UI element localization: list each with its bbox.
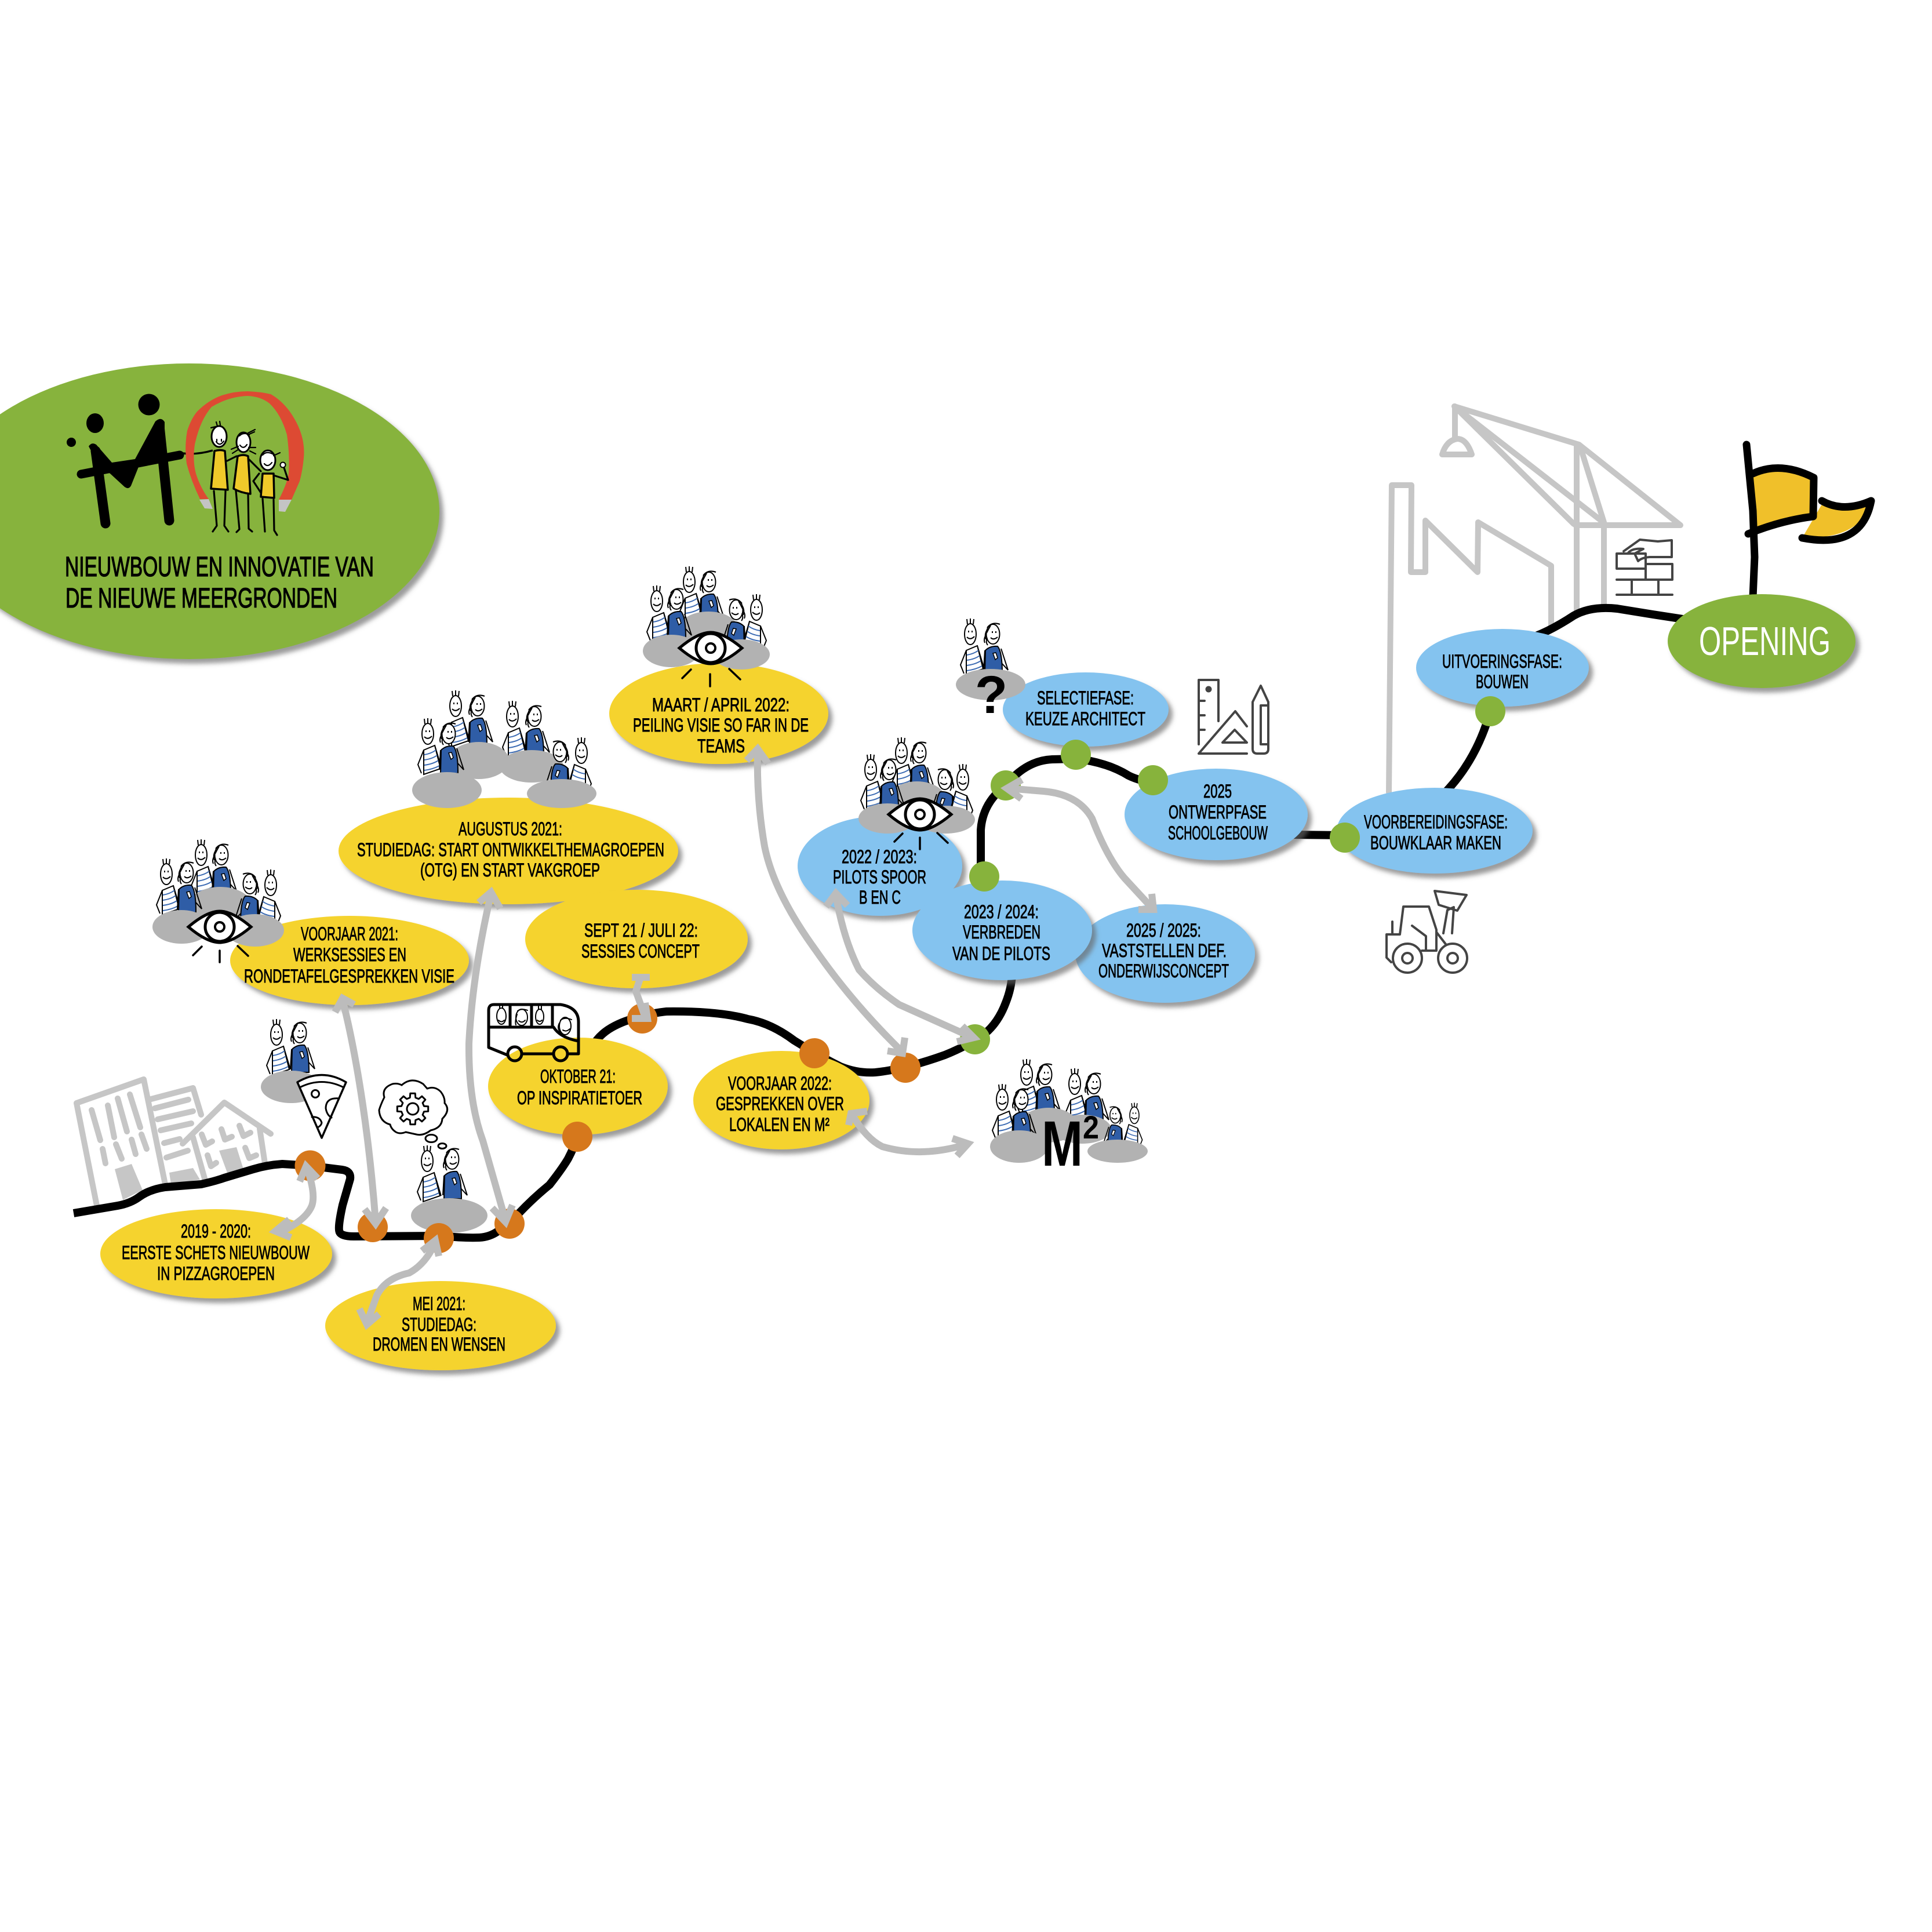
arrow: 2019-2020 to dot xyxy=(275,1166,318,1238)
milestone: voorjaar 2022: LOKALEN EN M² xyxy=(729,1114,829,1135)
arrow: sept 21 to dot xyxy=(632,977,650,1018)
milestone: 2025 / 2025: VASTSTELLEN DEF. xyxy=(1102,940,1227,961)
milestone: 2019-2020: 2019 - 2020: xyxy=(181,1221,251,1242)
milestone: augustus 2021 xyxy=(339,798,678,904)
milestone: 2023 / 2024: VAN DE PILOTS xyxy=(952,943,1050,964)
milestone: 2022 / 2023: B EN C xyxy=(859,887,901,908)
milestone: sept 21 / juli 22: SESSIES CONCEPT xyxy=(581,941,700,962)
arrow: augustus 2021 to dot xyxy=(469,892,512,1222)
route: black path xyxy=(74,608,1687,1238)
milestone: oktober 21: OP INSPIRATIETOER xyxy=(517,1087,642,1108)
icon: grey crane xyxy=(1442,406,1680,612)
icon: team with eye, pilots xyxy=(858,737,975,849)
milestone: maart / april 2022 xyxy=(609,663,828,764)
milestone: 2022 / 2023: PILOTS SPOOR xyxy=(833,867,926,887)
milestone: mei 2021 xyxy=(325,1281,556,1370)
milestone: voorbereidingsfase: BOUWKLAAR MAKEN xyxy=(1370,832,1501,853)
icon: pair with question mark: ? xyxy=(975,665,1007,725)
milestone: 2025 / 2025: 2025 / 2025: xyxy=(1126,920,1201,941)
milestone: augustus 2021: (OTG) EN START VAKGROEP xyxy=(420,860,600,881)
arrow: voorjaar 2021 to dot xyxy=(335,998,386,1224)
title panel xyxy=(0,363,439,659)
milestone: augustus 2021: STUDIEDAG: START ONTWIKKELTHEMAGROEPEN xyxy=(357,839,664,860)
milestone: voorbereidingsfase: VOORBEREIDINGSFASE: xyxy=(1364,812,1508,832)
arrow: maart 2022 to dot xyxy=(747,749,905,1053)
title text: DE NIEUWE MEERGRONDEN xyxy=(66,583,337,614)
milestone: opening xyxy=(1668,594,1855,688)
icon: wheel loader xyxy=(1387,891,1467,973)
milestone: opening: OPENING xyxy=(1699,618,1831,664)
milestone: maart / april 2022: PEILING VISIE SO FAR IN DE xyxy=(633,715,809,736)
milestone: 2025 / 2025: ONDERWIJSCONCEPT xyxy=(1098,960,1229,981)
milestone: voorjaar 2021: WERKSESSIES EN xyxy=(293,944,406,965)
milestone: 2022 / 2023 xyxy=(798,816,962,916)
milestone: selectiefase: SELECTIEFASE: xyxy=(1037,687,1134,708)
icon: team with eye, maart 2022 xyxy=(643,566,770,686)
milestone: 2023 / 2024: 2023 / 2024: xyxy=(964,901,1039,922)
milestone: voorjaar 2022: VOORJAAR 2022: xyxy=(728,1073,832,1094)
milestone: ontwerpfase: SCHOOLGEBOUW xyxy=(1168,823,1268,843)
icon: ruler, set square and pencil xyxy=(1199,680,1268,754)
milestone: 2023 / 2024 xyxy=(912,881,1092,980)
icon: team with M squared xyxy=(990,1059,1148,1180)
milestone: uitvoeringsfase xyxy=(1416,629,1589,707)
icon: flag xyxy=(1747,445,1871,597)
arrow: pilots to dot xyxy=(826,893,974,1042)
milestone: augustus 2021: AUGUSTUS 2021: xyxy=(459,818,562,839)
milestone: oktober 21 xyxy=(488,1038,668,1135)
milestone: voorjaar 2021: VOORJAAR 2021: xyxy=(301,923,398,944)
milestone: sept 21 / juli 22 xyxy=(525,890,748,988)
arrow: voorjaar 2022 to M squared team xyxy=(849,1111,968,1156)
milestone: 2019-2020: IN PIZZAGROEPEN xyxy=(157,1263,275,1284)
milestone: selectiefase: KEUZE ARCHITECT xyxy=(1025,708,1145,729)
icon: bus xyxy=(489,1005,578,1061)
milestone: sept 21 / juli 22: SEPT 21 / JULI 22: xyxy=(584,920,698,941)
title text: NIEUWBOUW EN INNOVATIE VAN xyxy=(65,552,374,583)
milestone: ontwerpfase: ONTWERPFASE xyxy=(1169,802,1267,823)
icon: team, augustus 2021 xyxy=(412,690,596,808)
arrow: dot to 2025 / 2025 xyxy=(1007,780,1154,909)
icon: hand laying bricks xyxy=(1617,540,1672,595)
milestone: voorjaar 2021: RONDETAFELGESPREKKEN VISIE xyxy=(244,966,454,987)
milestone: mei 2021: MEI 2021: xyxy=(413,1293,465,1314)
milestone: voorbereidingsfase xyxy=(1337,788,1533,874)
milestone: 2022 / 2023: 2022 / 2023: xyxy=(842,846,917,867)
milestone: maart / april 2022: TEAMS xyxy=(697,736,745,756)
orange milestone dots xyxy=(294,1003,920,1253)
title text xyxy=(65,552,374,614)
milestone: mei 2021: DROMEN EN WENSEN xyxy=(373,1334,505,1355)
icon: pair with pizza xyxy=(261,1019,346,1138)
milestone: mei 2021: STUDIEDAG: xyxy=(402,1314,476,1335)
milestone: 2023 / 2024: VERBREDEN xyxy=(963,922,1040,943)
logo: magnet xyxy=(185,391,304,512)
logo: three children xyxy=(211,421,288,535)
green milestone dots xyxy=(960,696,1505,1054)
icon: pair with question mark xyxy=(956,618,1025,725)
milestone: 2025 / 2025 xyxy=(1075,904,1255,1003)
icon: team with M squared: 2 xyxy=(1083,1109,1099,1145)
milestone: uitvoeringsfase: BOUWEN xyxy=(1476,671,1529,692)
logo: M figures xyxy=(67,394,213,523)
milestone: 2019-2020: EERSTE SCHETS NIEUWBOUW xyxy=(122,1242,310,1263)
milestone: oktober 21: OKTOBER 21: xyxy=(540,1066,616,1087)
milestone: selectiefase xyxy=(1003,672,1169,747)
arrow: mei 2021 to dot xyxy=(359,1240,439,1325)
milestone: voorjaar 2021 xyxy=(230,916,469,1005)
milestone: voorjaar 2022 xyxy=(693,1051,869,1149)
milestone: ontwerpfase xyxy=(1125,769,1308,860)
icon: team with M squared: M xyxy=(1042,1108,1083,1180)
icon: team with eye, voorjaar 2021 xyxy=(152,839,284,962)
milestone: ontwerpfase: 2025 xyxy=(1203,781,1232,802)
milestone: maart / april 2022: MAART / APRIL 2022: xyxy=(652,694,789,715)
icon: pair with thought cloud and gear xyxy=(379,1080,487,1233)
icon: grey buildings xyxy=(77,1079,271,1206)
milestone: voorjaar 2022: GESPREKKEN OVER xyxy=(716,1093,844,1114)
icon: grey factory xyxy=(1389,485,1551,792)
milestone: 2019-2020 xyxy=(100,1209,332,1298)
milestone: uitvoeringsfase: UITVOERINGSFASE: xyxy=(1442,651,1562,672)
